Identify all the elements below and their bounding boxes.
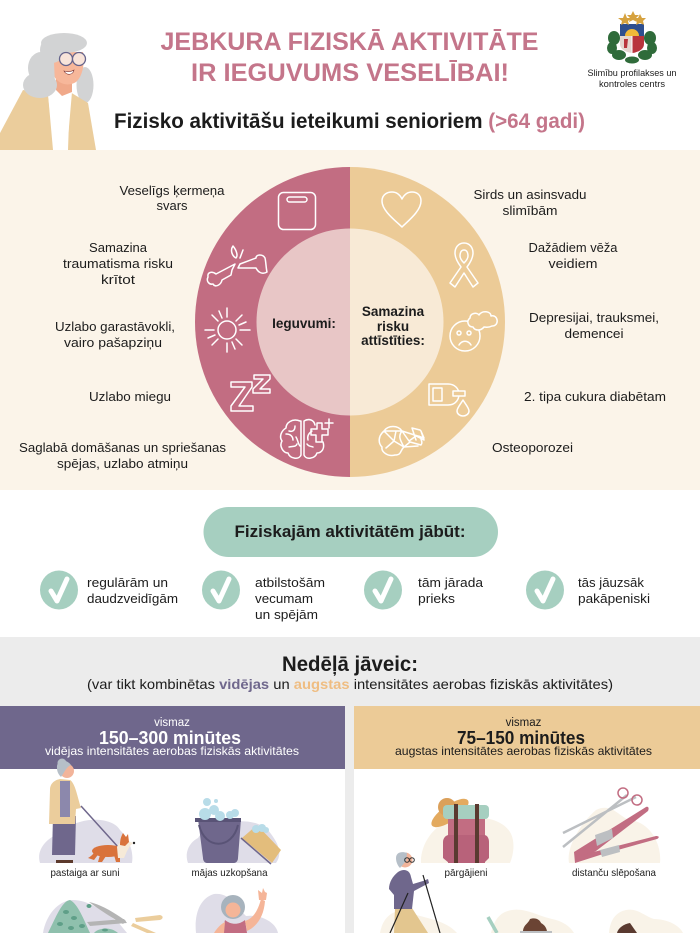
check item 1: daudzveidīgām: [87, 591, 178, 606]
check item 4: pakāpeniski: [578, 591, 650, 606]
check item 2: [202, 570, 325, 622]
check item 2: atbilstošām: [255, 575, 325, 590]
label: reduces risk: Samazina: [362, 304, 425, 319]
check item 1: regulārām un: [87, 575, 168, 590]
risk text: depression: Depresijai, trauksmei,: [529, 310, 659, 325]
weekly heading: Nedēļā jāveic:: [282, 653, 418, 676]
check item 2: vecumam: [255, 591, 313, 606]
label: reduces risk: [361, 304, 425, 348]
risk text: heart disease: Sirds un asinsvadu: [474, 187, 586, 202]
risk text: cancer: veidiem: [548, 256, 598, 271]
pill heading: [204, 507, 498, 557]
title: IR IEGUVUMS VESELĪBAI!: [191, 59, 509, 87]
panel: benefits and risks: [0, 150, 700, 490]
benefit text: cognition: [19, 440, 226, 471]
check item 3: tām jārada: [418, 575, 484, 590]
illustration: senior woman: [0, 33, 96, 150]
risk text: depression: demencei: [564, 326, 624, 341]
icon: ribbon: [450, 243, 478, 287]
vigorous header: [354, 706, 700, 769]
illustration: cleaning: [187, 798, 281, 864]
ring chart: [195, 167, 505, 477]
check item 2: un spējām: [255, 607, 318, 622]
icon: insulin and drop: [429, 384, 469, 416]
benefit text: mood: [55, 319, 175, 350]
caption: dog walk: pastaiga ar suni: [50, 867, 120, 879]
illustration: nordic walker: [380, 852, 457, 933]
risk text: osteoporosis: Osteoporozei: [492, 440, 573, 455]
illustration: backpack: [421, 794, 513, 863]
logo caption: Slimību profilakses un: [588, 68, 676, 79]
risk text: heart disease: [474, 187, 586, 218]
benefit text: fall risk: Samazina: [89, 240, 148, 255]
pill heading: Fiziskajām aktivitātēm jābūt:: [234, 522, 466, 541]
panel: weekly background: [0, 637, 700, 933]
panel: moderate activity: [0, 706, 345, 933]
icon: brain: [281, 419, 333, 458]
vigorous header: vismaz: [506, 717, 542, 729]
moderate header: [0, 706, 345, 769]
illustration: hedge trimming: [43, 900, 163, 933]
benefit text: mood: vairo pašapziņu: [64, 335, 162, 350]
label: benefits: Ieguvumi:: [272, 316, 336, 331]
logo caption: kontroles centrs: [599, 79, 665, 90]
benefit text: cognition: Saglabā domāšanas un spriešanas: [19, 440, 226, 455]
check item 3: [364, 570, 484, 610]
risk text: cancer: [528, 240, 618, 271]
check item 1: [40, 570, 178, 610]
icon: osteoporotic bone: [379, 426, 424, 455]
benefit text: body weight: [120, 183, 225, 213]
icon: broken bone: [207, 246, 267, 286]
moderate header: 150–300 minūtes: [99, 728, 241, 748]
title: [160, 28, 538, 87]
illustration: exercising senior: [196, 888, 278, 933]
logo caption: [588, 68, 676, 90]
moderate header: vismaz: [154, 717, 190, 729]
illustration: dog walk: [39, 758, 135, 863]
illustration: digging: [488, 910, 574, 933]
risk text: diabetes: 2. tipa cukura diabētam: [524, 389, 666, 404]
benefit text: sleep: Uzlabo miegu: [89, 389, 171, 404]
caption: skiing: distanču slēpošana: [572, 867, 656, 879]
illustration: third bottom activity: [609, 910, 683, 933]
weekly note: (var tikt kombinētas vidējas un augstas intensitātes aerobas fiziskās aktivitātes): [87, 676, 613, 692]
benefit text: fall risk: krītot: [101, 272, 135, 287]
icon: sleep: [231, 375, 270, 411]
icon: heart: [382, 192, 421, 227]
label: reduces risk: risku: [377, 319, 409, 334]
icon: sun: [205, 308, 250, 352]
benefit text: body weight: svars: [156, 198, 188, 213]
benefit text: body weight: Veselīgs ķermeņa: [120, 183, 225, 198]
logo: Latvian coat of arms: [607, 11, 657, 64]
label: reduces risk: attīstīties:: [361, 333, 425, 348]
benefit text: cognition: spējas, uzlabo atmiņu: [57, 456, 188, 471]
caption: hiking: pārgājieni: [444, 867, 488, 879]
risk text: depression: [529, 310, 659, 341]
vigorous header: augstas intensitātes aerobas fiziskās aktivitātes: [395, 744, 652, 758]
check item 3: prieks: [418, 591, 456, 606]
caption: cleaning: mājas uzkopšana: [192, 867, 268, 879]
check item 4: tās jāuzsāk: [578, 575, 644, 590]
panel: vigorous activity: [354, 706, 700, 933]
moderate header: vidējas intensitātes aerobas fiziskās aktivitātes: [45, 744, 299, 758]
benefit text: fall risk: traumatisma risku: [63, 256, 173, 271]
risk text: heart disease: slimībām: [502, 203, 558, 218]
icon: scale: [278, 192, 316, 230]
vigorous header: 75–150 minūtes: [457, 728, 585, 748]
benefit text: fall risk: [63, 240, 173, 287]
subtitle: Fizisko aktivitāšu ieteikumi senioriem (>64 gadi): [114, 110, 585, 133]
check item 4: [526, 570, 650, 610]
benefit text: mood: Uzlabo garastāvokli,: [55, 319, 175, 334]
risk text: cancer: Dažādiem vēža: [528, 240, 618, 255]
illustration: skiing: [563, 788, 660, 863]
title: JEBKURA FIZISKĀ AKTIVITĀTE: [160, 28, 538, 56]
icon: sad face and cloud: [450, 312, 497, 351]
